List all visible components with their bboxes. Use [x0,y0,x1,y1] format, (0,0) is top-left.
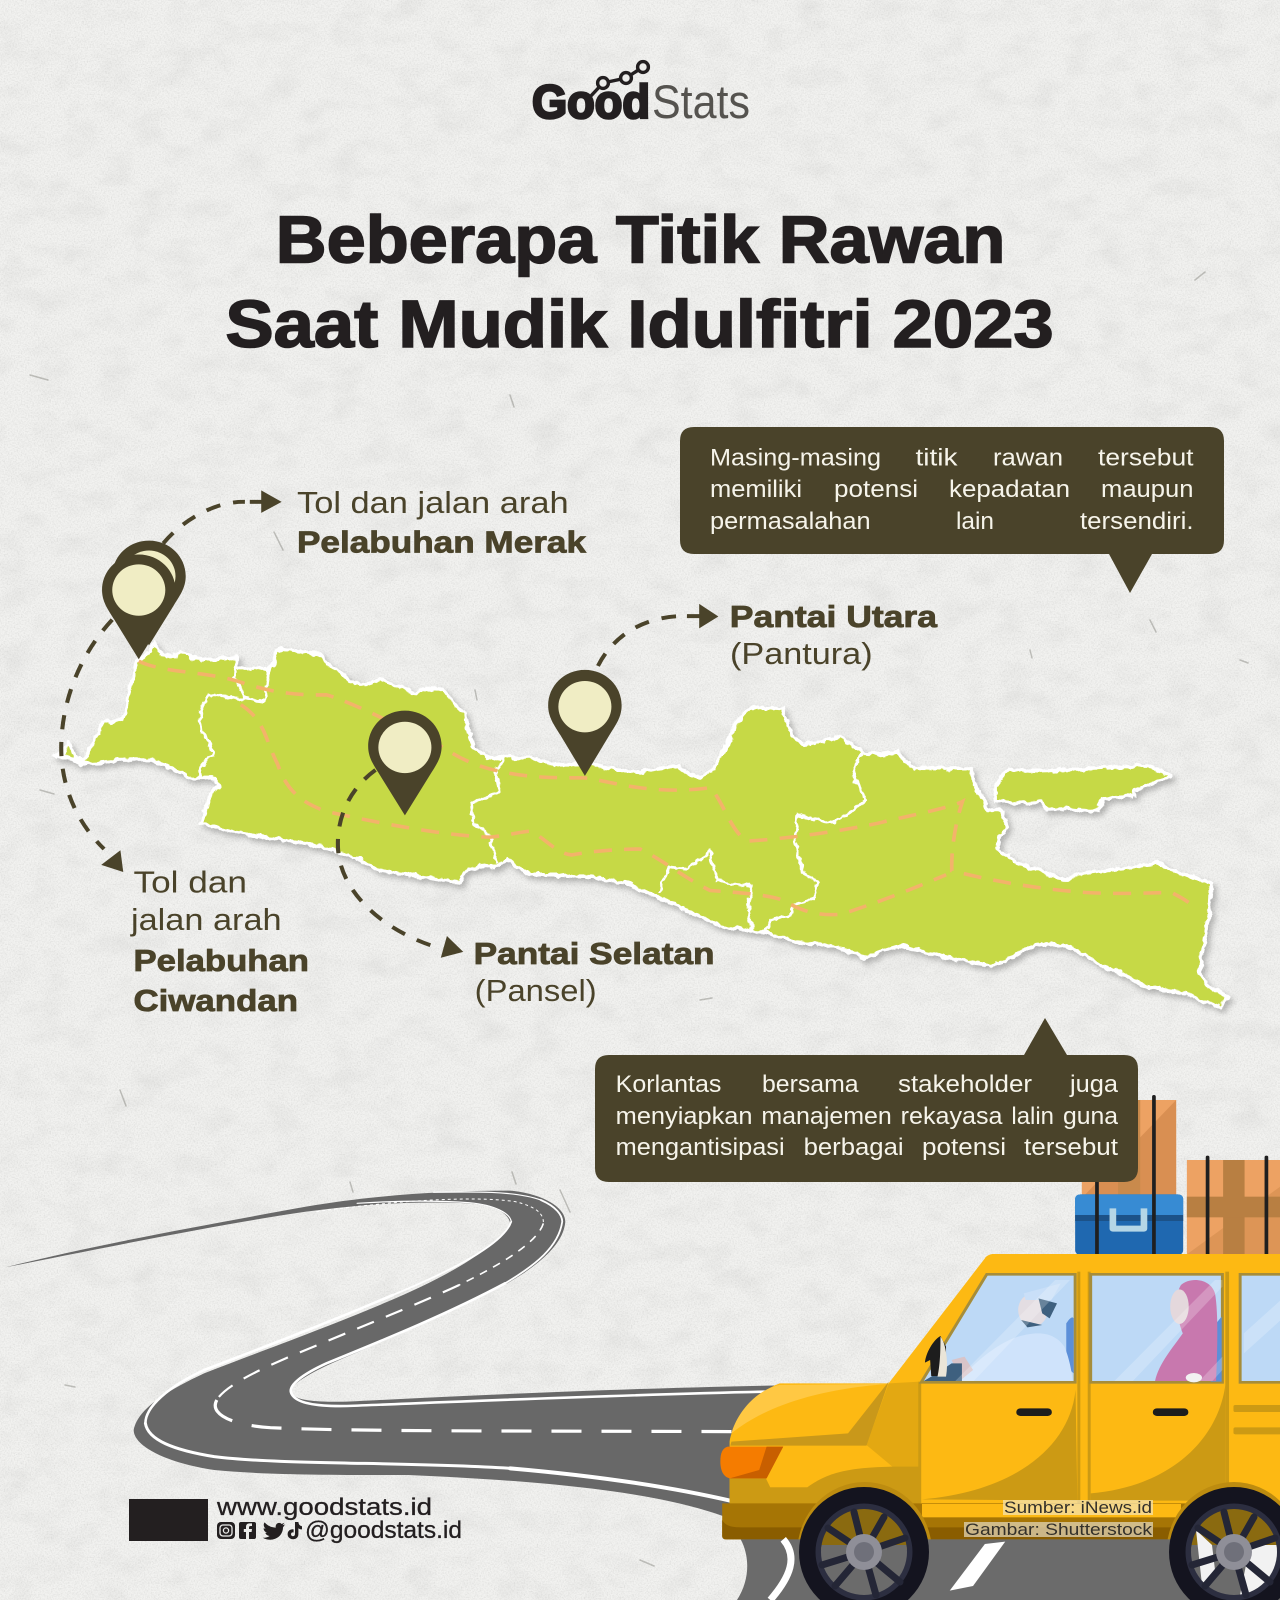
footer: website: www.goodstats.id [216,1494,432,1521]
callout: top: tersebut [1098,444,1194,472]
callout: bottom: lalin [1011,1103,1054,1130]
passenger in pink hijab [1155,1280,1222,1382]
arrow: route to Pelabuhan Ciwandan [61,620,123,872]
callout: bottom: menyiapkan [616,1103,752,1130]
footer: social icons [217,1522,302,1540]
lower bumper front [730,1478,811,1507]
pins: stacked pins at Merak [102,541,186,659]
callout: bottom: stakeholder [898,1071,1032,1098]
wheel arches [797,1482,1280,1600]
arrow: route to Pantai Selatan [338,770,463,958]
label: Pelabuhan Ciwandan: Ciwandan [134,983,298,1018]
front wheel [799,1487,929,1600]
logo: GoodStats [532,62,750,128]
icon: twitter [262,1522,285,1540]
callout: top: maupun [1101,476,1194,503]
arrow: route to Pelabuhan Merak [163,490,282,543]
source credits: Gambar: Shutterstock [965,1520,1153,1539]
logo wordmark [532,75,750,128]
icon: facebook [239,1522,256,1539]
right cardboard box [1187,1160,1280,1255]
callout: top: lain [956,508,994,535]
driver [924,1283,1074,1381]
skirt [722,1503,1280,1539]
footer: social handle: @goodstats.id [305,1517,462,1544]
logo wordmark: Stats [652,75,750,128]
road edge lines [145,1192,765,1502]
label: Pantai Selatan [474,936,715,1008]
road centre dashes [215,1199,740,1432]
pin: Jawa Barat [368,711,442,815]
callout: top: permasalahan [710,508,871,535]
luggage on roof rack [1075,1097,1280,1272]
callout: top: potensi [834,476,918,503]
road below car [737,1539,1280,1600]
rear vents [1233,1405,1280,1434]
icon: tiktok [288,1522,302,1539]
label: Pelabuhan Ciwandan: Pelabuhan [134,943,309,978]
footer: QR placeholder block [129,1499,208,1541]
door seams [918,1272,1229,1505]
callout: top: titik [916,444,959,472]
label: Pelabuhan Ciwandan: Tol dan [134,864,247,900]
callout: bottom: tersebut [1024,1134,1118,1161]
label: Pelabuhan Ciwandan: jalan arah [130,902,282,937]
label: Pantai Selatan: (Pansel) [475,973,597,1008]
icon: instagram [217,1522,235,1539]
blue suitcase [1075,1194,1183,1255]
callout: bottom: mengantisipasi [616,1134,785,1161]
road markings below car [770,1539,1005,1600]
label: Pelabuhan Merak [297,485,587,560]
road surface [5,1191,1280,1600]
logo chart line icon [589,62,648,98]
callout: bottom: manajemen [761,1103,892,1130]
car body [730,1254,1280,1507]
title: Saat Mudik Idulfitri 2023 [225,287,1054,362]
title [225,203,1054,362]
hood crease [730,1382,889,1446]
car [720,1254,1280,1600]
callout: bottom: rekayasa [901,1103,1003,1130]
map of Java with routes and pins [53,490,1228,1007]
label: Pelabuhan Ciwandan [130,864,309,1018]
callout: top: memiliki [710,476,802,503]
label: Pantai Selatan: Pantai Selatan [474,936,715,971]
callout: top: Masing-masing [710,444,881,472]
map: dashed mudik routes [139,661,1196,915]
side mirror [925,1336,946,1376]
door handles [1016,1408,1188,1416]
callout: bottom: berbagai [804,1134,904,1161]
callout: bottom: juga [1069,1071,1119,1098]
windows [921,1274,1280,1382]
door shading [922,1390,1077,1501]
label: Pantai Utara: Pantai Utara [730,599,938,634]
rear wheel [1169,1487,1280,1600]
front arch shade [770,1467,920,1505]
hood highlight [731,1384,887,1433]
callout: top: tersendiri. [1080,508,1194,535]
roof straps [1097,1097,1266,1272]
source credits [964,1498,1153,1539]
label: Pelabuhan Merak: Pelabuhan Merak [297,524,587,560]
callout: bottom: bersama [762,1071,859,1098]
label: Pantai Utara: (Pantura) [730,636,873,671]
headlight [720,1447,783,1478]
title: Beberapa Titik Rawan [276,203,1005,278]
upper cardboard box [1082,1100,1176,1200]
callout: top [680,427,1224,593]
window reflections [955,1280,1280,1381]
callout: bottom: potensi [922,1134,1006,1161]
logo wordmark: Good [532,75,650,128]
arrow: route to Pantai Utara [598,604,718,666]
callout: top: rawan [993,444,1063,472]
label: Pantai Utara [730,599,938,671]
callout: bottom: Korlantas [616,1071,721,1098]
map: Java island with province borders [53,642,1228,1007]
callout: bottom [595,1018,1138,1182]
source credits: Sumber: iNews.id [1004,1498,1152,1517]
pillar shade [866,1382,920,1502]
callout: bottom: guna [1063,1103,1119,1130]
label: Pelabuhan Merak: Tol dan jalan arah [297,485,569,520]
callout: top: kepadatan [949,476,1070,503]
road [5,1191,1280,1600]
pin: Jawa Tengah [548,670,622,776]
